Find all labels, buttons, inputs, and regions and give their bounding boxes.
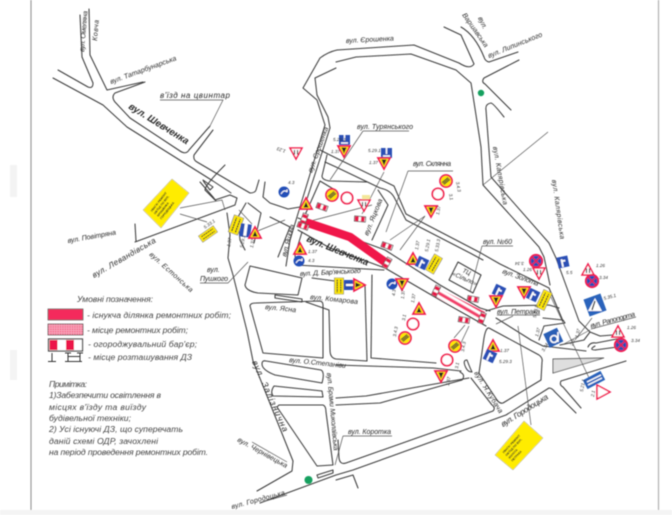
sign: blue parking	[543, 328, 563, 348]
street names: вул. Яцкова	[363, 198, 384, 237]
street names: вул. Петрака	[497, 309, 540, 316]
street names: вул. Рапопорта	[590, 311, 636, 330]
signs: south of Shevchenko start	[294, 243, 317, 266]
signs: west group: 5.33.1	[203, 218, 216, 230]
signs: south of hatched section west: 3.4.3	[392, 326, 399, 337]
street names: вул. Брами Миколаївська	[325, 373, 339, 451]
sign: big yellow notice west: ГОРОДОЦЬКА	[159, 200, 176, 220]
signs: south of hatched section west: 3.1	[401, 314, 407, 321]
green marker south	[304, 476, 312, 484]
signs: group at Shevchenko end: 1.37	[414, 240, 421, 250]
signs: Komarova group: 4.3	[391, 289, 397, 296]
note: на період проведення ремонтних робіт.	[49, 447, 208, 457]
street names: вул. Липинського	[487, 32, 544, 60]
legend title: Умовні позначення:	[76, 294, 154, 304]
signs: Zolota group	[515, 255, 608, 287]
signs: group at Shevchenko end: 5.33.3	[434, 238, 441, 252]
note	[48, 379, 208, 457]
sign: big yellow notice west: УВАГА! РЕМОНТ	[150, 191, 168, 213]
sign: blue road marking	[583, 371, 605, 389]
signs: group at Shevchenko end	[407, 238, 442, 274]
street names: вул. Ясна	[265, 304, 296, 314]
signs: west group: 1.37	[249, 238, 256, 248]
street names: вул. Д. Бар'янського	[300, 268, 361, 278]
traffic island	[553, 358, 604, 373]
signs: Petraka group	[483, 284, 552, 364]
signs: north-west of Shevchenko: 4.3	[288, 180, 295, 185]
street names: вул. Калярівська	[550, 179, 566, 240]
street names: вул. Омеляна	[79, 11, 90, 52]
signs: west group: 5.29.1	[239, 234, 246, 248]
signs: Petraka group: 5.29.3	[499, 359, 512, 364]
shopping centre label: «Сільпо»	[451, 271, 478, 288]
note: Примітка:	[49, 379, 88, 389]
legend item: sign location: - місце розташування ДЗ	[88, 352, 193, 362]
signs: north-west of Shevchenko: 1.37	[331, 149, 340, 154]
signs: Zolota group: 3.34	[599, 275, 608, 280]
sign codes south: 2.5	[569, 338, 576, 347]
signs: south of Shevchenko start: 4.3	[308, 258, 315, 263]
legend item: repair place: - місце ремонтних робіт;	[87, 325, 189, 335]
sign: big yellow notice south	[495, 421, 543, 470]
legend	[48, 294, 232, 362]
signs: Sklyana group	[425, 175, 462, 217]
signs: south of hatched section west: 3.4.3	[460, 341, 467, 352]
signs: Petraka group: 5.33.3	[532, 304, 539, 318]
sign: big yellow notice west	[143, 179, 189, 228]
signs: west group	[198, 215, 261, 248]
leader lines	[160, 100, 636, 502]
street names: вул. Золота	[501, 268, 540, 288]
note: будівельної техніки;	[49, 413, 132, 423]
note: 1)Забезпечити освітлення в	[49, 390, 162, 400]
street names: вул. Калярівська	[491, 146, 509, 206]
signs: Rapoporta group	[612, 325, 640, 351]
signs: north-west of Shevchenko	[276, 135, 392, 211]
signs: Zolota group: 3.34	[515, 261, 524, 266]
street names: вул. Комарова	[310, 294, 358, 306]
street names: вул. №60	[483, 239, 512, 246]
sign codes south: 3.34	[541, 342, 550, 352]
red section: existing repair area	[305, 222, 385, 262]
signs: Komarova group	[334, 278, 408, 299]
signs: Sklyana group: 3.1	[448, 193, 454, 201]
street names: вул. Залізнична	[250, 359, 291, 433]
street names: вул. Левандівська	[90, 236, 158, 280]
hatched section: repair works place	[436, 289, 485, 320]
street names: Ковча	[92, 20, 101, 41]
signs: group at Shevchenko end: 5.29.1	[424, 238, 431, 252]
sign: big yellow notice south: ОБ'ЇЗД ПО ВУЛ.	[504, 437, 523, 457]
signs: north-west of Shevchenko: 5.29.1	[333, 137, 346, 142]
sign: big yellow notice west: ЄРОШЕНКА	[156, 201, 170, 218]
sign: big yellow notice south: УВАГА! РЕМОНТ	[502, 434, 521, 454]
signs: south of hatched section west: 3.1	[454, 362, 460, 369]
sign codes south	[534, 327, 596, 398]
signs: Rapoporta group: 3.34	[631, 338, 640, 343]
signs: west group: 1.37	[226, 237, 233, 247]
signs: north-west of Shevchenko: 1.23	[276, 146, 286, 154]
street names: вул. Шевченка	[305, 234, 371, 269]
street names: вул. Єрошенка	[346, 35, 394, 45]
street names: вул. О.Степаніви	[289, 356, 346, 370]
street names: вул. Склянна	[413, 161, 451, 168]
sign: yield triangle	[597, 385, 610, 399]
signs: Petraka group: 1.37	[500, 348, 509, 353]
signs: south of Shevchenko start: 1.37	[308, 249, 317, 254]
note: даній схемі ОДР, зачохлені	[49, 436, 159, 446]
signs: north-west of Shevchenko: 1.37	[369, 160, 378, 165]
street names: вул. Повітряна	[67, 229, 117, 245]
street names: вул. Естонська	[148, 251, 194, 294]
signs: Sklyana group: 3.4.3	[455, 181, 462, 193]
street names: вул. Коротка	[348, 429, 391, 436]
street names: в'їзд на цвинтар	[160, 91, 231, 100]
street names: вул. Яшина	[281, 224, 296, 258]
note: місцях в'їзду та виїзду	[49, 402, 147, 412]
street names: Пушкого	[200, 276, 228, 283]
legend item: barrier	[48, 339, 198, 351]
sign: big yellow notice south: ПЕТРАКА	[510, 449, 523, 462]
street names: вул. Татарбунарська	[109, 54, 178, 86]
barriers	[297, 203, 486, 324]
signs: south of hatched section west	[392, 293, 467, 386]
street names: вул. Єрошенка	[307, 126, 330, 174]
street names: вул. Городоцька	[499, 392, 550, 429]
signs: Komarova group: 1.37	[400, 289, 406, 299]
signs: south of hatched section west: 1.37	[445, 376, 452, 386]
sign codes south: 1.37	[574, 328, 581, 338]
street names: вул.	[207, 267, 220, 274]
street names: вул. Я.Кубача	[472, 370, 505, 415]
street names: вул. Турянського	[357, 124, 413, 131]
signs: north-west of Shevchenko: 5.29.1	[368, 148, 381, 153]
legend item: barrier: - огороджувальний бар'єр;	[88, 339, 198, 349]
street names: Варшавська	[460, 12, 489, 49]
sign: big yellow notice west: ОБ'ЇЗД ПО ВУЛ.	[153, 195, 170, 215]
legend item: repair place	[48, 324, 189, 335]
sign codes south: 2.1	[590, 390, 596, 398]
signs: Zolota group: 1.26	[596, 263, 605, 268]
signs: south of hatched section west: 1.37	[410, 293, 417, 303]
sign codes south: 1.37	[534, 327, 541, 337]
sign codes south: 5.21.1	[579, 378, 586, 392]
sign: crosswalk: 5.35.1	[603, 293, 617, 301]
note: 2) Усі існуючі ДЗ, що суперечать	[48, 424, 183, 434]
signs: Zolota group: 5.5	[566, 270, 573, 275]
street names: вул. Шевченка	[126, 101, 191, 147]
street names: вул. Чернівецька	[236, 436, 289, 470]
street names: вул.	[476, 16, 488, 30]
legend item: existing repair section: - існукча ділянка ремонтних робіт;	[87, 310, 232, 320]
sign: crosswalk	[583, 293, 617, 317]
signs: Rapoporta group: 1.26	[627, 325, 636, 330]
sign: big yellow notice south: ЗОЛОТА	[507, 447, 519, 460]
green marker north	[478, 90, 484, 96]
signs: Sklyana group: 1.37	[435, 205, 442, 215]
shopping centre label: ТЦ	[461, 267, 472, 277]
signs: Zolota group: 1.26	[523, 267, 532, 272]
street names: вул. Городоцька	[230, 489, 286, 511]
